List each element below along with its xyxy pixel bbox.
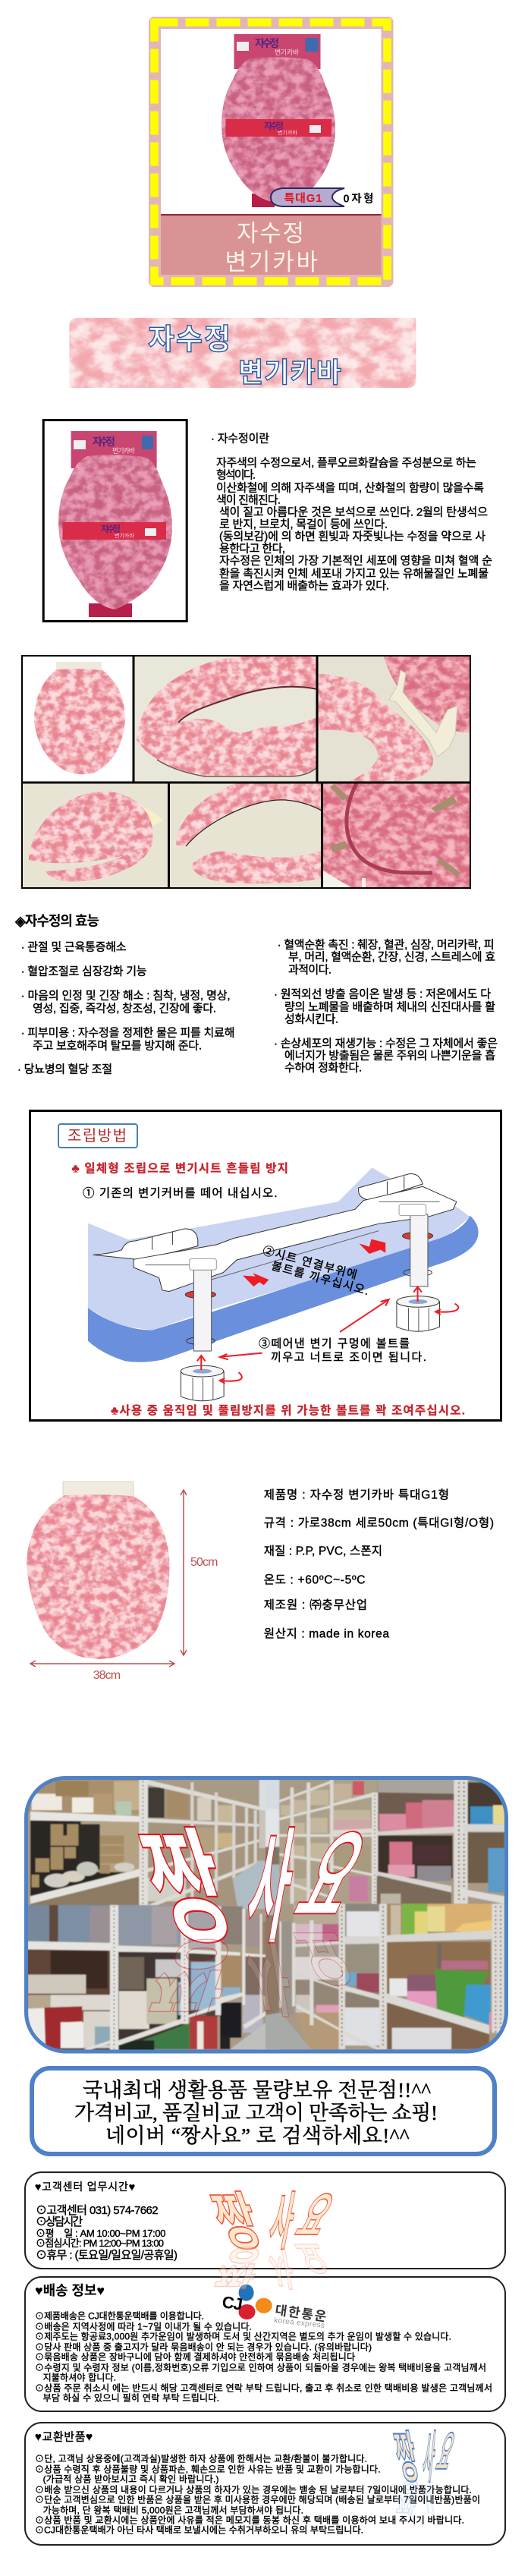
product package: 자수정 bbox=[264, 121, 284, 131]
logo: CJ 대한통운: 대한통운 bbox=[274, 2303, 327, 2324]
list: benefits right column: 에너지가 방출됨은 물론 주위의 나쁜기운을 흡 bbox=[284, 1049, 495, 1063]
logo: blue 짱사요 with reflection: 짱 bbox=[391, 2428, 423, 2489]
badge: 특대G1: 0자형 bbox=[343, 193, 373, 205]
text block: 자수정이란: 색이 짙고 아름다운 것은 보석으로 쓰인다. 2월의 탄생석으 bbox=[219, 505, 488, 519]
panel: customer center hours: ⊙고객센터 031) 574-7662 bbox=[36, 2204, 159, 2217]
instruction texts: ♣ 일체형 조립으로 변기시트 흔들림 방지 bbox=[71, 1161, 288, 1175]
list: benefits right column: · 손상세포의 재생기능 : 수정은 그 자체에서 좋은 bbox=[274, 1037, 498, 1050]
heading: 조립방법: 조립방법 bbox=[68, 1127, 127, 1145]
panel: shipping info: ⊙제주도는 항공료3,000원 추가운임이 발생하며 도서 및 산간지역은 별도의 추가 운임이 발생할 수 있습니다. bbox=[35, 2332, 451, 2342]
instruction texts bbox=[71, 1161, 465, 1418]
heading: 조립방법 bbox=[58, 1124, 137, 1148]
logo: CJ 대한통운 bbox=[221, 2285, 327, 2330]
logo: 짱사요 overlay with reflection: 짱 bbox=[129, 1819, 247, 1959]
list: benefits right column: 량의 노폐물을 배출하며 체내의 신진대사를 활 bbox=[284, 1000, 495, 1014]
photo: hinge view bbox=[318, 657, 470, 782]
panel: exchange and returns: ⊙단순 고객변심으로 인한 반품은 상품을 받은 후 미사용한 경우에만 해당되며 (배송된 날로부터 7일이내반품)반품이 bbox=[35, 2494, 480, 2505]
spec list: 원산지 : made in korea bbox=[264, 1627, 389, 1641]
photo: closed lid and seat bbox=[23, 783, 168, 887]
product package: 변기카바 bbox=[275, 49, 300, 56]
text block: 자수정이란: 용한다고 한다, bbox=[219, 542, 285, 556]
photo: warehouse shelves bbox=[23, 1776, 508, 2057]
title: 자수정 변기카바: 자수정 bbox=[237, 220, 304, 247]
callout: store slogan: 국내최대 생활용품 물량보유 전문점!!^^ bbox=[83, 2079, 431, 2102]
photo: underside with tabs bbox=[323, 783, 470, 887]
heading: 자수정의 효능: ◈자수정의 효능 bbox=[14, 914, 99, 929]
list: benefits left column bbox=[17, 941, 235, 1076]
panel: exchange and returns: ⊙배송 받으신 상품의 내용이 다르거나 상품의 하자가 있는 경우에는 밷송 된 날로부터 7일이내에 반품가능합니다. bbox=[35, 2485, 472, 2496]
badge: 특대G1 bbox=[271, 188, 373, 206]
panel: shipping info: ⊙제품배송은 CJ대한통운택배를 이용합니다. bbox=[35, 2310, 204, 2321]
panel: product picture frame bbox=[43, 420, 187, 621]
logo: CJ 대한통운: korea express bbox=[274, 2316, 325, 2330]
list: benefits right column bbox=[274, 938, 498, 1075]
panel: customer center hours: ⊙상담시간 bbox=[36, 2215, 83, 2228]
panel: exchange and returns: ⊙단, 고객님 상용중에(고객과실)발생한 하자 상품에 한해서는 교환/환불이 불가합니다. bbox=[35, 2453, 367, 2464]
panel: customer center hours: ♥고객센터 업무시간♥ bbox=[35, 2181, 135, 2193]
banner: marble title strip: 변기카바 bbox=[238, 357, 341, 388]
spec list bbox=[264, 1488, 494, 1641]
arrow: 50cm bbox=[181, 1490, 218, 1655]
red arrows bbox=[197, 1239, 458, 1384]
list: benefits right column: · 원적외선 방출 음이온 발생 등 : 저온에서도 다 bbox=[274, 988, 491, 1000]
text block: 자수정이란: 자수정은 인체의 가장 기본적인 세포에 영향을 미쳐 혈액 순 bbox=[219, 554, 492, 568]
logo: 짱사요 overlay with reflection: 요 bbox=[280, 1820, 382, 1939]
panel: shipping info: ⊙당사 판매 상품 중 출고지가 달라 묶음배송이 안 되는 경우가 있습니다. (유의바랍니다) bbox=[35, 2342, 372, 2353]
panel: exchange and returns: ⊙CJ대한통운택배가 아닌 타사 택배로 보낼시에는 수취거부하오니 유의 부탁드립니다. bbox=[35, 2524, 363, 2535]
list: benefits right column: 성화시킨다. bbox=[284, 1012, 338, 1026]
product dimensions image bbox=[27, 1482, 218, 1682]
text block: 자수정이란 bbox=[211, 433, 492, 592]
list: benefits left column: 주고 보호해주며 탈모를 방지해 준다. bbox=[33, 1040, 202, 1052]
logo: orange 짱사요 with reflection: 짱 bbox=[205, 2187, 269, 2257]
text block: 자수정이란: 색이 진해진다. bbox=[216, 493, 281, 507]
photo: seat ring arcs bbox=[169, 783, 322, 887]
panel: shipping info: 지불하셔야 합니다. bbox=[43, 2373, 116, 2383]
panel: exchange and returns: 가능하며, 단 왕복 택배비 5,000원은 고객님께서 부담하셔야 됩니다. bbox=[43, 2505, 303, 2515]
panel: product picture frame: 변기카바 bbox=[112, 447, 136, 455]
spec list: 재질 : P.P, PVC, 스폰지 bbox=[264, 1544, 382, 1557]
spec list: 온도 : +60ºC~-5ºC bbox=[264, 1573, 366, 1586]
logo: blue 짱사요 with reflection: 사 bbox=[420, 2428, 438, 2489]
instruction texts: 볼트를 끼우십시오. bbox=[270, 1259, 370, 1298]
panel: exchange and returns bbox=[25, 2423, 505, 2545]
left half shelves bbox=[23, 1780, 275, 2051]
list: benefits left column: · 마음의 인정 및 긴장 해소 : 침착, 냉정, 명상, bbox=[21, 990, 231, 1002]
right half shelves bbox=[266, 1780, 504, 2051]
banner: marble title strip bbox=[69, 318, 416, 388]
callout: store slogan: 가격비교, 품질비교 고객이 만족하는 쇼핑! bbox=[74, 2102, 438, 2124]
panel: exchange and returns: (가급적 상품 받아보시고 즉시 확인 바랍니다.) bbox=[43, 2474, 218, 2485]
product package bbox=[222, 34, 335, 207]
text block: 자수정이란: · 자수정이란 bbox=[211, 433, 269, 445]
logo: orange 짱사요 with reflection: 짱 bbox=[210, 2241, 268, 2293]
panel: shipping info bbox=[25, 2277, 505, 2411]
spec list: 규격 : 가로38cm 세로50cm (특대GI형/O형) bbox=[264, 1516, 494, 1530]
panel: product picture frame: 자수정 bbox=[101, 524, 121, 534]
panel: product picture frame: 자수정 bbox=[93, 436, 115, 448]
logo: CJ 대한통운: CJ bbox=[221, 2292, 244, 2314]
panel: exchange and returns: ⊙상품 반품 및 교환시에는 상품안에 사유를 적은 메모지를 동봉 하신 후 택배를 이용하여 보내 주시기 바랍니다. bbox=[35, 2515, 464, 2526]
instruction texts: ③떼어낸 변기 구멍에 볼트를 bbox=[259, 1337, 410, 1350]
product package: 변기카바 bbox=[278, 129, 298, 136]
panel: assembly instructions bbox=[30, 1111, 501, 1421]
seat cover bbox=[27, 1482, 169, 1659]
arrow: 50cm: 50cm bbox=[190, 1556, 218, 1569]
list: benefits left column: · 관절 및 근육통증해소 bbox=[21, 941, 127, 953]
text block: 자수정이란: 자주색의 수정으로서, 플루오르화칼슘을 주성분으로 하는 bbox=[216, 457, 476, 469]
panel: exchange and returns: ⊙상품 수령직 후 상품불량 및 상품파손, 훼손으로 인한 사유는 반품 및 교환이 가능합니다. bbox=[35, 2464, 381, 2474]
photo: seat cover with lid front view bbox=[23, 657, 133, 782]
panel: shipping info: ♥배송 정보♥ bbox=[35, 2283, 105, 2298]
logo: 짱사요 overlay with reflection: 사 bbox=[238, 1819, 303, 1959]
panel: product hero card bbox=[149, 17, 393, 287]
panel: customer center hours: ⊙점심시간: PM 12:00~PM 13:00 bbox=[36, 2237, 164, 2249]
logo: orange 짱사요 with reflection: 사 bbox=[264, 2188, 300, 2257]
panel: customer center hours: ⊙휴무 : (토요일/일요일/공휴일) bbox=[36, 2249, 178, 2262]
list: benefits left column: 영성, 집중, 즉각성, 창조성, 긴장에 좋다. bbox=[33, 1002, 216, 1016]
panel: shipping info: ⊙수령지 및 수령자 정보 (이름,정화번호)오류 기입으로 인하여 상품이 되돌아올 경우에는 왕복 택배비용을 고객님께서 bbox=[35, 2362, 486, 2373]
list: benefits right column: · 혈액순환 촉진 : 췌장, 혈관, 심장, 머리카락, 피 bbox=[278, 938, 495, 952]
text block: 자수정이란: 로 반지, 브로치, 목걸이 등에 쓰인다. bbox=[219, 518, 388, 531]
arrow: 38cm bbox=[30, 1661, 174, 1682]
panel: shipping info: ⊙상품 주문 취소시 에는 반드시 해당 고객센터로 연락 부탁 드립니다, 출고 후 취소로 인한 택배비용 발생은 고객님께서 bbox=[35, 2383, 492, 2394]
panel: customer center hours: ⊙평 일 : AM 10:00~PM 17:00 bbox=[36, 2228, 165, 2239]
spec list: 제조원 : ㈜충무산업 bbox=[264, 1598, 367, 1612]
list: benefits left column: · 혈압조절로 심장강화 기능 bbox=[21, 965, 147, 978]
product package: 자수정 bbox=[255, 37, 279, 49]
logo: orange 짱사요 with reflection: 사 bbox=[265, 2241, 297, 2291]
text block: 자수정이란: 환을 촉진시켜 인체 세포내 가지고 있는 유해물질인 노폐물 bbox=[219, 568, 489, 580]
logo: 짱사요 overlay with reflection: 짱 bbox=[141, 1929, 244, 2022]
logo: blue 짱사요 with reflection bbox=[391, 2428, 459, 2518]
text block: 자수정이란: (동의보감)에 의 하면 흰빛과 자줏빛나는 수정을 약으로 사 bbox=[219, 530, 485, 543]
photo: seat ring close-up bbox=[134, 657, 317, 782]
callout: store slogan: 네이버 “짱사요” 로 검색하세요!^^ bbox=[105, 2124, 410, 2147]
badge: 특대G1: 특대G1 bbox=[284, 192, 322, 205]
banner: marble title strip: 자수정 bbox=[148, 324, 231, 356]
panel: exchange and returns: ♥교환반품♥ bbox=[35, 2430, 93, 2444]
logo: blue 짱사요 with reflection: 짱 bbox=[394, 2475, 422, 2518]
instruction texts: ②시트 연결부위에 bbox=[261, 1244, 359, 1282]
text block: 자수정이란: 을 자연스럽게 배출하는 효과가 있다. bbox=[219, 580, 389, 592]
logo: blue 짱사요 with reflection: 사 bbox=[421, 2476, 436, 2517]
logo: 짱사요 overlay with reflection: 사 bbox=[240, 1929, 297, 2023]
text block: 자수정이란: 이산화철에 의해 자주색을 띠며, 산화철의 함량이 많을수록 bbox=[216, 481, 484, 495]
logo: 짱사요 overlay with reflection bbox=[129, 1819, 382, 2023]
logo: 짱사요 overlay with reflection: 요 bbox=[284, 1917, 366, 1993]
panel: product picture frame: 변기카바 bbox=[115, 532, 135, 539]
title: 자수정 변기카바 bbox=[225, 220, 318, 276]
panel: shipping info: 부담 하실 수 있으니 필히 연락 부탁 드립니다. bbox=[43, 2392, 219, 2403]
panel: customer center hours bbox=[25, 2172, 505, 2269]
text block: 자수정이란: 형석이다. bbox=[216, 469, 256, 481]
list: benefits left column: · 당뇨병의 혈당 조절 bbox=[17, 1063, 112, 1076]
logo: blue 짱사요 with reflection: 요 bbox=[432, 2428, 459, 2480]
title: 자수정 변기카바: 변기카바 bbox=[225, 249, 318, 276]
arrow: 38cm: 38cm bbox=[93, 1669, 121, 1682]
list: benefits left column: · 피부미용 : 자수정을 정제한 물은 피를 치료해 bbox=[21, 1026, 235, 1040]
logo: orange 짱사요 with reflection: 요 bbox=[289, 2235, 335, 2278]
instruction texts: ♣사용 중 움직임 및 풀림방지를 위 가능한 볼트를 꽉 조여주십시오. bbox=[111, 1404, 465, 1418]
spec list: 제품명 : 자수정 변기카바 특대G1형 bbox=[264, 1488, 449, 1501]
panel: shipping info: ⊙묶음배송 상품은 장바구니에 담아 함께 결제하셔야 안전하게 묶음배송 처리됩니다 bbox=[35, 2351, 355, 2362]
logo: orange 짱사요 with reflection bbox=[205, 2187, 342, 2293]
panel: shipping info: ⊙배송은 지역사정에 따라 1~7일 이내가 될 수 있습니다. bbox=[35, 2321, 252, 2332]
list: benefits right column: 수하여 정화한다. bbox=[284, 1061, 362, 1075]
photo grid: six product photos bbox=[21, 656, 471, 888]
logo: orange 짱사요 with reflection: 요 bbox=[287, 2187, 342, 2247]
diagram: toilet seat bolts bbox=[88, 1167, 479, 1401]
instruction texts: ① 기존의 변기커버를 떼어 내십시오. bbox=[83, 1186, 278, 1200]
callout: store slogan bbox=[32, 2068, 495, 2154]
instruction texts: 끼우고 너트로 조이면 됩니다. bbox=[271, 1351, 426, 1364]
list: benefits right column: 과적이다. bbox=[288, 964, 331, 976]
list: benefits right column: 부, 머리, 혈액순환, 간장, 신경, 스트레스에 효 bbox=[288, 950, 495, 964]
